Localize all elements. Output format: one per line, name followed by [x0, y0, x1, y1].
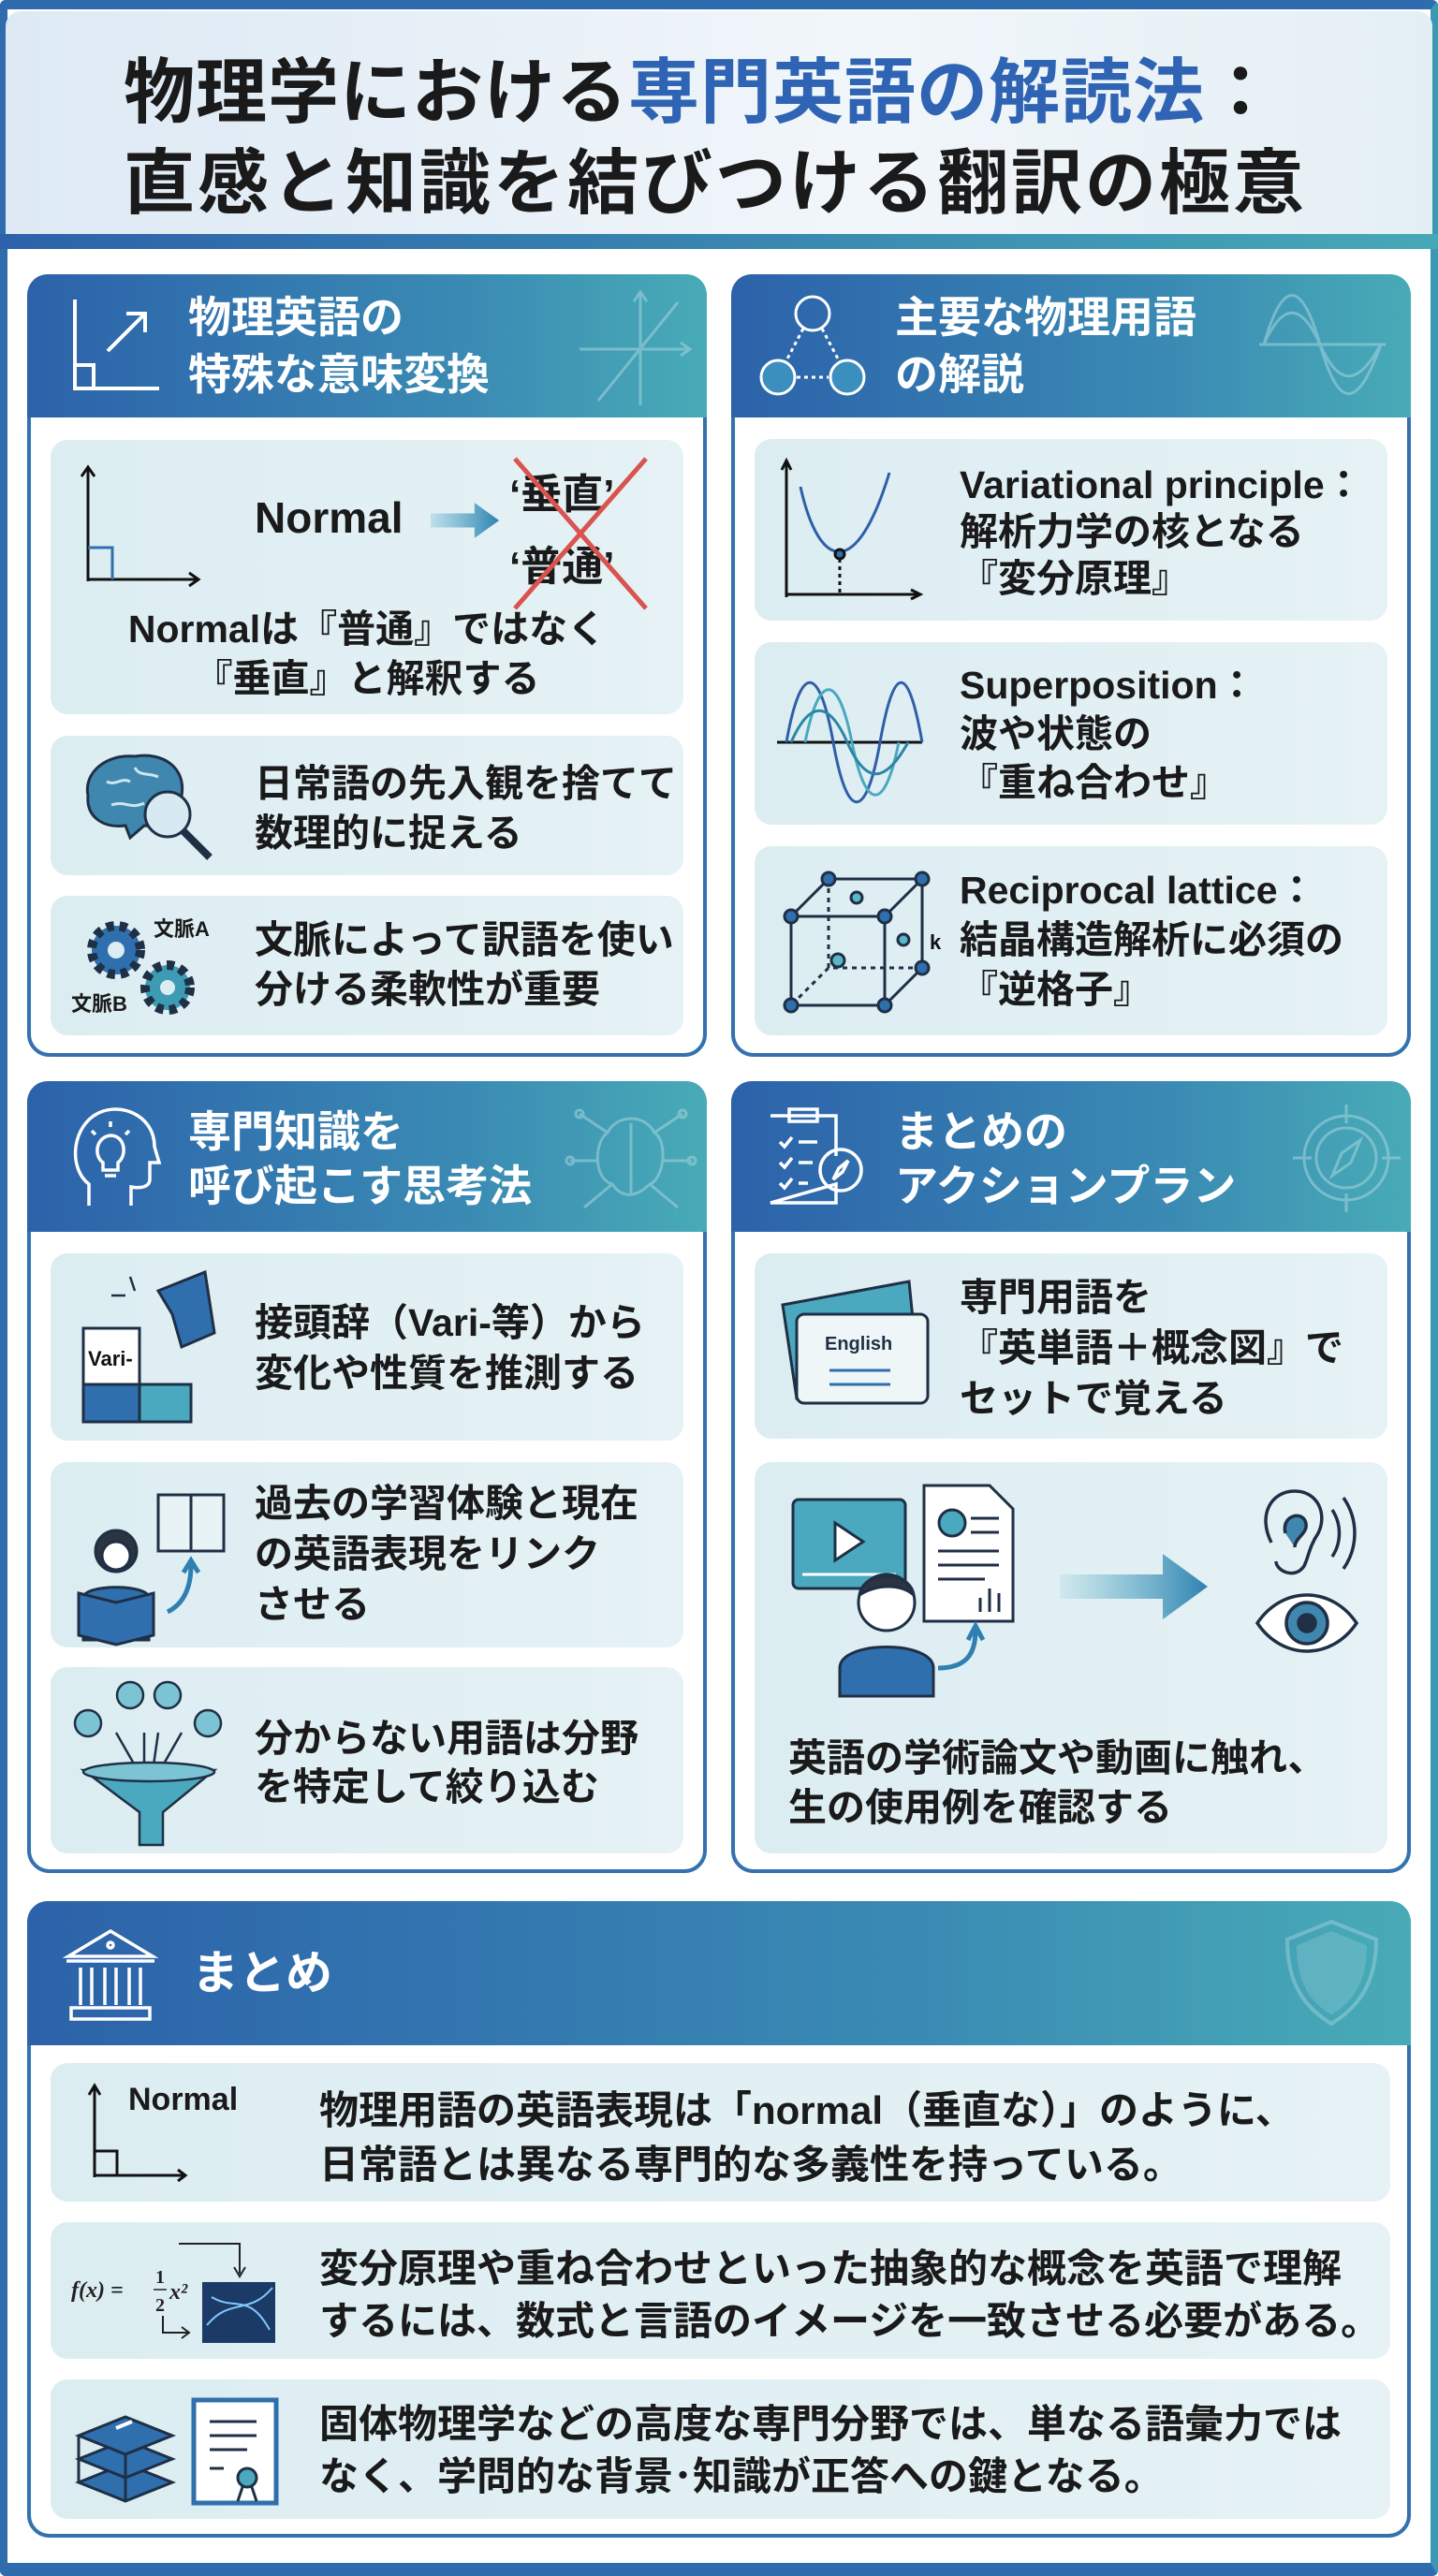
- card: normal polysemy: [51, 2063, 1390, 2202]
- card: past learning: [51, 1462, 683, 1647]
- icon: gears: 文脈B: [71, 992, 127, 1016]
- heading: まとめ: [192, 1947, 332, 1999]
- watermark axes: [580, 290, 693, 405]
- icon: formula: x²: [169, 2280, 188, 2305]
- card: superposition: 波や状態の: [960, 712, 1152, 755]
- card: academic papers: 英語の学術論文や動画に触れ、: [788, 1736, 1326, 1779]
- card: normal: 『垂直』と解釈する: [195, 657, 539, 700]
- card: variational principle: [755, 439, 1387, 621]
- heading: 主要な物理用語: [895, 293, 1196, 342]
- card: formula and image: [51, 2222, 1390, 2359]
- panel: summary: [27, 1901, 1411, 2538]
- card: discard everyday language: 数理的に捉える: [255, 812, 522, 855]
- icon: video, document and person: [792, 1485, 1015, 1698]
- watermark sine: [1259, 294, 1386, 395]
- card: books and certificate: 固体物理学などの高度な専門分野では、単なる語彙力では: [319, 2402, 1342, 2446]
- card: funnel: を特定して絞り込む: [255, 1765, 599, 1808]
- icon: brain magnifier: [86, 754, 213, 860]
- card: variational principle: Variational principle：: [960, 463, 1363, 506]
- icon: waves: [777, 681, 923, 803]
- card: reciprocal lattice: Reciprocal lattice：: [960, 869, 1316, 912]
- icon: formula: f(x) =: [71, 2278, 124, 2303]
- card: flashcards: [755, 1253, 1387, 1439]
- card: normal: ‘普通’: [509, 544, 614, 590]
- card: past learning: 過去の学習体験と現在: [255, 1482, 638, 1525]
- icon: gears: [71, 917, 210, 1016]
- heading: の解説: [895, 350, 1024, 399]
- card: normal: Normal: [255, 493, 403, 542]
- arrow: [431, 503, 499, 538]
- card: books and certificate: なく、学問的な背景･知識が正答への鍵となる。: [319, 2454, 1164, 2498]
- panel: special meaning conversion: [27, 274, 707, 1057]
- heading: [895, 1107, 1236, 1210]
- watermark circuit brain: [565, 1108, 697, 1208]
- icon: nodes: [760, 296, 865, 395]
- heading: 呼び起こす思考法: [188, 1162, 532, 1210]
- card: normal polysemy: 日常語とは異なる専門的な多義性を持っている。: [319, 2143, 1182, 2187]
- icon: perpendicular axes: [81, 464, 200, 588]
- icon: Normal axes: [88, 2083, 187, 2183]
- card: formula and image: 変分原理や重ね合わせといった抽象的な概念を英語で理解: [319, 2247, 1342, 2291]
- icon: cube lattice: k: [930, 930, 942, 954]
- icon: clipboard compass: [770, 1107, 863, 1205]
- card: flashcards: 専門用語を: [960, 1276, 1152, 1319]
- card: normal: ‘垂直’: [509, 472, 614, 518]
- icon: puzzle: [82, 1269, 216, 1423]
- icon: puzzle: Vari-: [88, 1347, 133, 1370]
- icon: reader with book: [77, 1494, 225, 1646]
- panel: key physics terms: [731, 274, 1411, 1057]
- icon: axes arrow: [73, 300, 159, 390]
- icon: cube lattice: [783, 871, 942, 1013]
- card: reciprocal lattice: 『逆格子』: [960, 968, 1152, 1011]
- card: normal polysemy: 物理用語の英語表現は「normal（垂直な）」のように、: [319, 2088, 1295, 2132]
- icon: funnel: [73, 1681, 223, 1846]
- panel: action plan: [731, 1081, 1411, 1873]
- card: superposition: Superposition：: [960, 664, 1256, 707]
- card: context: 文脈によって訳語を使い: [255, 918, 674, 961]
- watermark compass: [1293, 1105, 1401, 1212]
- icon: English card: English: [825, 1334, 892, 1354]
- heading: まとめの: [895, 1107, 1067, 1156]
- card: flashcards: セットで覚える: [960, 1377, 1227, 1420]
- icon: head with bulb: [73, 1107, 161, 1206]
- card: superposition: 『重ね合わせ』: [960, 761, 1228, 804]
- heading: 専門知識を: [188, 1107, 404, 1156]
- card: flashcards: 『英単語＋概念図』で: [960, 1326, 1343, 1369]
- card: past learning: させる: [255, 1583, 370, 1626]
- card: variational principle: 解析力学の核となる: [960, 510, 1304, 553]
- card: prefix: 接頭辞（Vari-等）から: [255, 1301, 645, 1344]
- icon: formula: 1: [155, 2267, 165, 2288]
- card: reciprocal lattice: [755, 846, 1387, 1035]
- icon: gears: 文脈A: [154, 917, 210, 941]
- icon: English card: [781, 1280, 929, 1404]
- watermark shield: [1285, 1920, 1378, 2026]
- card: variational principle: 『変分原理』: [960, 557, 1190, 600]
- card: normal: [51, 440, 683, 714]
- card: superposition: [755, 642, 1387, 825]
- title: 物理学における専門英語の解読法：: [124, 53, 1277, 133]
- card: discard everyday language: [51, 736, 683, 875]
- card: books and certificate: [51, 2379, 1390, 2519]
- card: context: 分ける柔軟性が重要: [255, 968, 600, 1011]
- icon: formula: [71, 2243, 275, 2343]
- icon: formula: 2: [155, 2295, 165, 2316]
- icon: books and certificate: [75, 2398, 279, 2505]
- icon: eye: [1255, 1593, 1358, 1653]
- card: prefix: 変化や性質を推測する: [255, 1352, 638, 1395]
- heading: 特殊な意味変換: [188, 350, 490, 399]
- card: academic papers: 生の使用例を確認する: [788, 1786, 1172, 1829]
- icon: ear: [1264, 1489, 1357, 1574]
- card: formula and image: するには、数式と言語のイメージを一致させる必要がある。: [319, 2299, 1380, 2343]
- card: discard everyday language: 日常語の先入観を捨てて: [255, 762, 677, 805]
- arrow: [1060, 1554, 1208, 1619]
- heading: [188, 293, 490, 399]
- card: past learning: の英語表現をリンク: [255, 1532, 600, 1575]
- heading: 物理英語の: [188, 293, 404, 342]
- title: 直感と知識を結びつける翻訳の極意: [124, 144, 1307, 224]
- card: reciprocal lattice: 結晶構造解析に必須の: [960, 918, 1343, 961]
- card: funnel: [51, 1667, 683, 1853]
- card: normal polysemy: Normal: [128, 2082, 238, 2117]
- heading: [188, 1107, 532, 1210]
- card: prefix: [51, 1253, 683, 1441]
- icon: institution: [62, 1929, 159, 2021]
- red X: [513, 457, 648, 610]
- card: academic papers: [755, 1462, 1387, 1853]
- heading: アクションプラン: [895, 1162, 1236, 1210]
- card: normal: Normalは『普通』ではなく: [128, 607, 606, 651]
- panel: thinking method: [27, 1081, 707, 1873]
- card: funnel: 分からない用語は分野: [255, 1717, 638, 1760]
- heading: [895, 293, 1196, 399]
- icon: parabola graph: [781, 457, 923, 601]
- title: [6, 11, 1432, 236]
- card: context: [51, 896, 683, 1035]
